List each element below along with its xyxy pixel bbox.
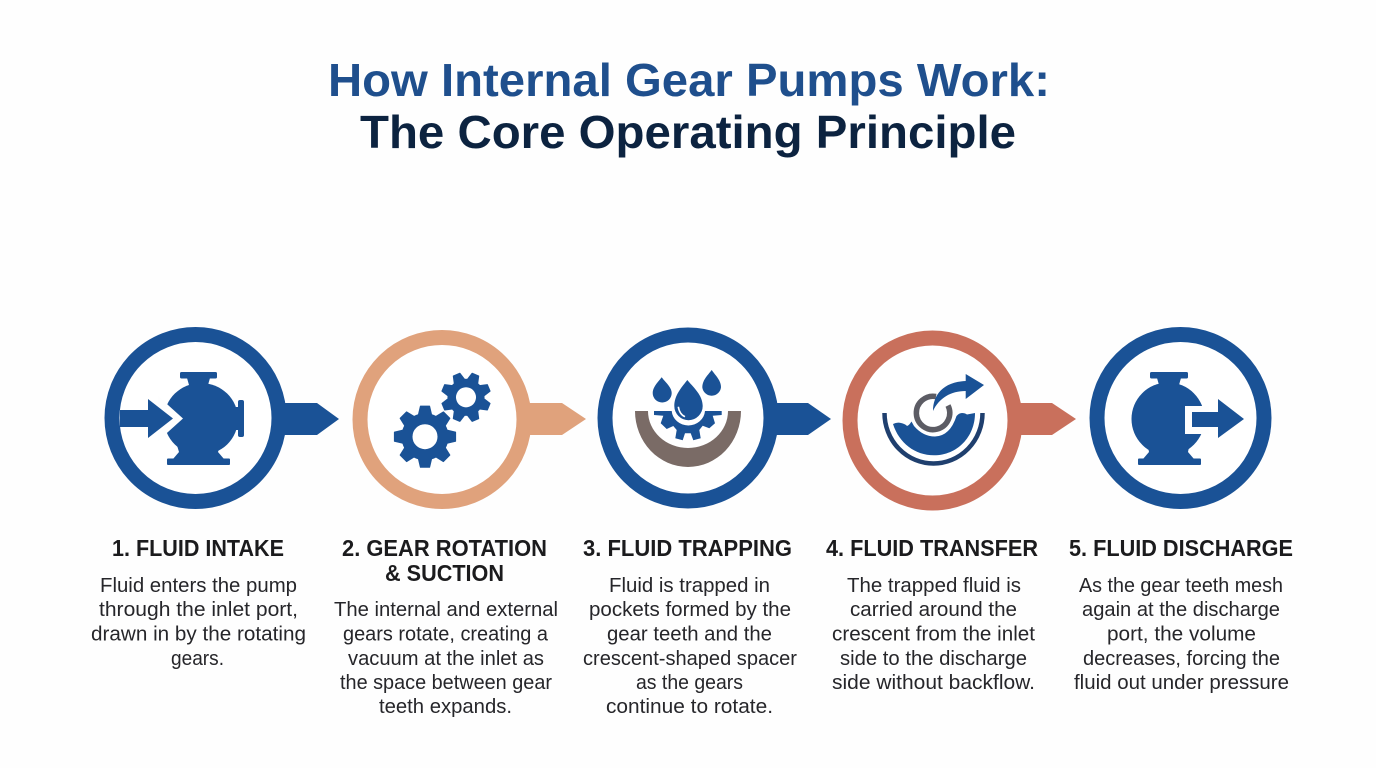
description 3: pockets formed by the xyxy=(589,598,791,621)
step 1 ring with pointer xyxy=(112,334,339,502)
description 4: side to the discharge xyxy=(840,647,1027,670)
panel: step 2 gear rotation xyxy=(334,338,586,718)
heading 3: 3. FLUID TRAPPING xyxy=(583,535,792,561)
description 4: carried around the xyxy=(850,598,1017,621)
panel: step 4 fluid transfer xyxy=(826,338,1076,694)
description 2: teeth expands. xyxy=(379,695,512,718)
description 5: port, the volume xyxy=(1107,622,1256,646)
heading 2: & SUCTION xyxy=(385,560,504,586)
panel: step 3 fluid trapping xyxy=(583,335,831,718)
description 4: side without backflow. xyxy=(832,671,1035,694)
description 2: the space between gear xyxy=(340,671,552,694)
heading 4: 4. FLUID TRANSFER xyxy=(826,535,1038,561)
step 5 ring xyxy=(1097,334,1264,502)
description 3: continue to rotate. xyxy=(606,695,773,718)
description 2: gears rotate, creating a xyxy=(343,622,549,646)
icon: pump with outlet arrow xyxy=(1132,372,1244,465)
description 1: Fluid enters the pump xyxy=(100,574,297,597)
panel: step 1 fluid intake xyxy=(91,334,339,670)
description 5: As the gear teeth mesh xyxy=(1079,574,1283,597)
description 1: through the inlet port, xyxy=(99,598,298,621)
description 3: as the gears xyxy=(636,671,743,694)
icon: pump with inlet arrow xyxy=(120,372,244,465)
description 3: gear teeth and the xyxy=(607,622,772,646)
description 5: again at the discharge xyxy=(1082,598,1280,621)
description 5: fluid out under pressure xyxy=(1074,671,1289,694)
heading 2: 2. GEAR ROTATION xyxy=(342,535,547,561)
title xyxy=(328,54,1050,158)
description 1 xyxy=(91,574,306,670)
description 4 xyxy=(832,574,1035,694)
description 2: The internal and external xyxy=(334,598,558,621)
description 4: crescent from the inlet xyxy=(832,622,1035,646)
description 1: drawn in by the rotating xyxy=(91,622,306,646)
icon: two gears xyxy=(394,365,498,467)
description 3 xyxy=(583,574,797,718)
description 5 xyxy=(1074,574,1289,694)
description 3: Fluid is trapped in xyxy=(609,574,770,597)
title: How Internal Gear Pumps Work: xyxy=(328,54,1050,106)
panel: step 5 fluid discharge xyxy=(1069,334,1293,694)
step 4 ring with pointer xyxy=(850,338,1076,503)
description 3: crescent-shaped spacer xyxy=(583,647,797,670)
heading 2 xyxy=(342,535,547,586)
description 5: decreases, forcing the xyxy=(1083,647,1280,670)
description 2 xyxy=(334,598,558,718)
heading 1: 1. FLUID INTAKE xyxy=(112,535,284,561)
icon: crescent transfer with curved arrow xyxy=(884,374,984,464)
description 1: gears. xyxy=(171,647,224,670)
step 2 ring with pointer xyxy=(360,338,586,502)
icon: crescent, half gear and drops xyxy=(635,370,741,467)
description 2: vacuum at the inlet as xyxy=(348,647,544,670)
step 3 ring with pointer xyxy=(605,335,831,501)
description 4: The trapped fluid is xyxy=(847,574,1021,597)
heading 5: 5. FLUID DISCHARGE xyxy=(1069,535,1293,561)
title: The Core Operating Principle xyxy=(360,106,1016,158)
